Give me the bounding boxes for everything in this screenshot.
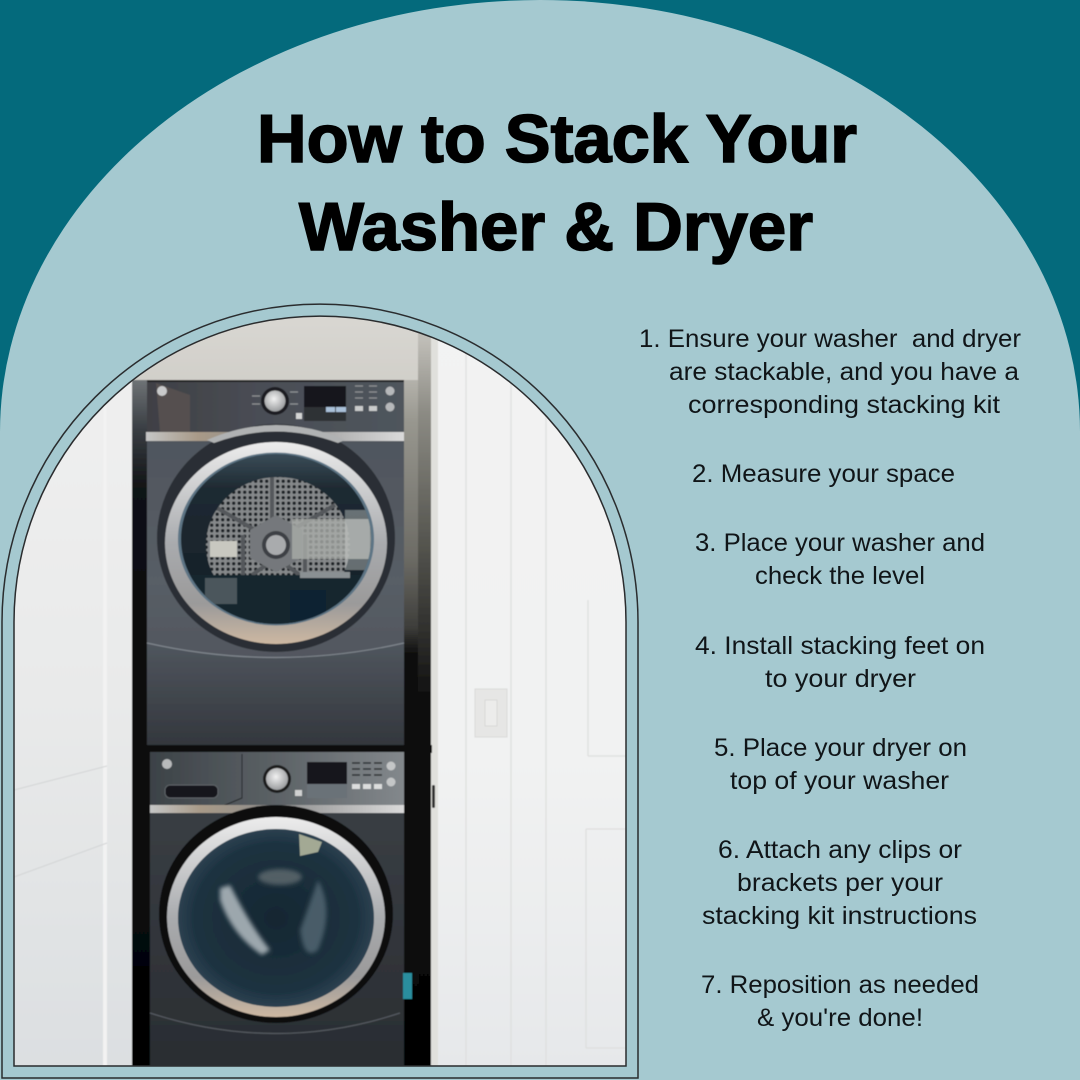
washer <box>150 752 412 1066</box>
step 1 <box>639 325 1021 419</box>
washer chrome strip <box>150 805 404 813</box>
closet left shadow strip <box>132 380 150 1066</box>
light switch <box>475 689 507 737</box>
door hinge <box>432 785 435 808</box>
outer arch outline <box>2 304 638 1078</box>
step 2: 2. Measure your space <box>692 460 955 488</box>
title: How to Stack Your <box>257 101 857 177</box>
dryer drum <box>205 476 350 576</box>
step 3 <box>695 529 985 590</box>
dryer chrome strip <box>146 432 404 441</box>
step 6: stacking kit instructions <box>702 902 977 930</box>
step 6: 6. Attach any clips or <box>718 836 962 864</box>
title <box>257 101 857 265</box>
step 5 <box>714 734 967 795</box>
step 1: corresponding stacking kit <box>688 391 1000 419</box>
closet right shadow strip <box>403 330 432 1066</box>
step 3: check the level <box>755 562 925 590</box>
step 4: 4. Install stacking feet on <box>695 632 985 660</box>
title: Washer & Dryer <box>299 189 813 265</box>
step 1: 1. Ensure your washer and dryer <box>639 325 1021 353</box>
step 6: brackets per your <box>737 869 943 897</box>
step 5: 5. Place your dryer on <box>714 734 967 762</box>
step 7: & you're done! <box>757 1004 923 1032</box>
step 1: are stackable, and you have a <box>669 358 1019 386</box>
washer control panel <box>150 752 404 808</box>
step 4 <box>695 632 985 693</box>
step 5: top of your washer <box>730 767 949 795</box>
washer door <box>159 805 393 1023</box>
step 7: 7. Reposition as needed <box>701 971 979 999</box>
right white door panels <box>431 316 627 1066</box>
dryer window reflection and lower glass <box>204 509 372 623</box>
dryer <box>146 380 404 746</box>
left white door <box>14 316 133 1066</box>
step 4: to your dryer <box>765 665 916 693</box>
step 3: 3. Place your washer and <box>695 529 985 557</box>
washer lower drawer line <box>150 1013 400 1034</box>
step 7 <box>701 971 979 1032</box>
teal object beside washer <box>403 973 412 999</box>
arched photo: stacked washer and dryer <box>14 316 627 1066</box>
dryer door <box>157 424 395 652</box>
dryer lower drawer panel <box>146 662 405 746</box>
inner arch outline <box>14 316 626 1066</box>
closet back wall <box>132 316 432 446</box>
gap between machines <box>133 745 432 753</box>
dryer control panel <box>147 380 404 433</box>
step 6 <box>702 836 977 930</box>
